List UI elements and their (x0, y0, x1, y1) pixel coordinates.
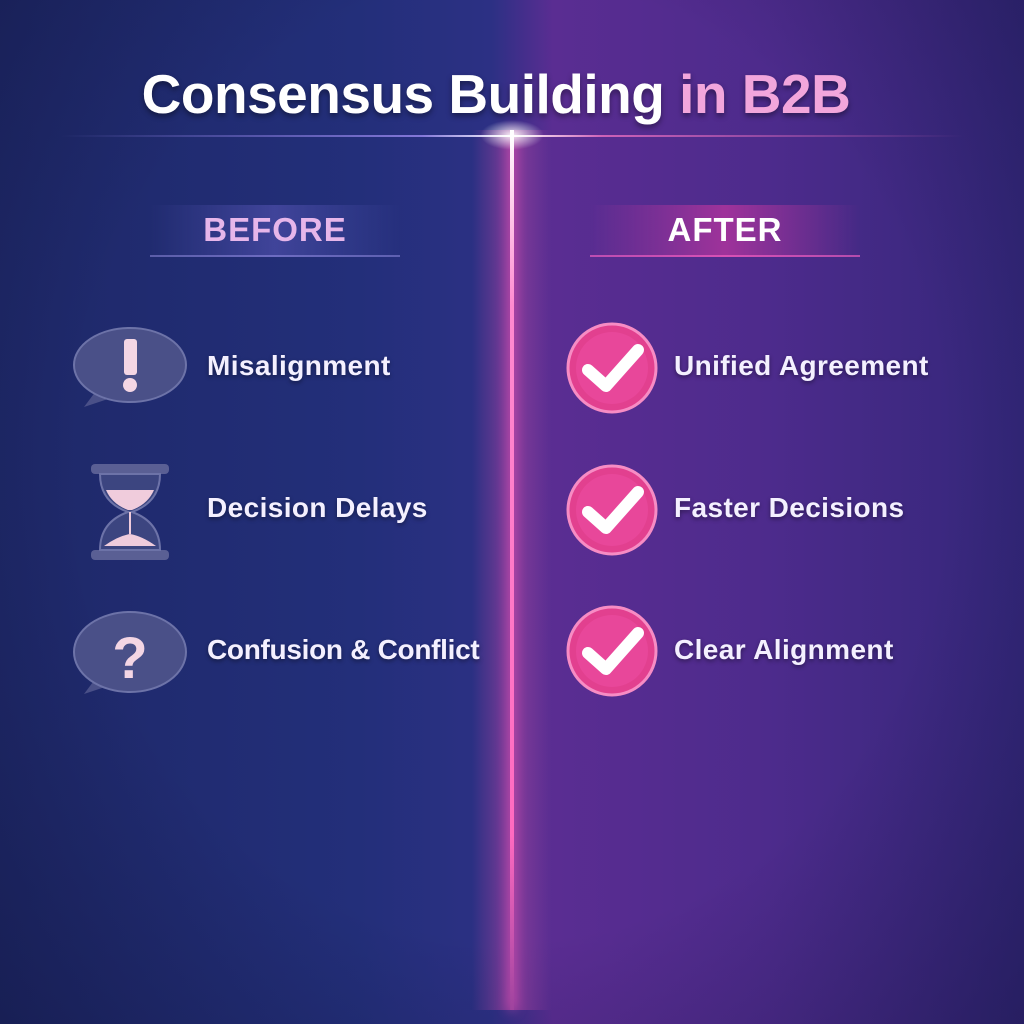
icon: hourglass (91, 464, 169, 560)
text: decision delays: Decision Delays (207, 492, 428, 523)
divider glow line (472, 130, 552, 1010)
text: unified agreement: Unified Agreement (674, 350, 929, 381)
icon: question bubble: ? (112, 626, 148, 691)
text: faster decisions: Faster Decisions (674, 492, 904, 523)
heading: after: AFTER (668, 211, 782, 248)
text: clear alignment: Clear Alignment (674, 634, 894, 665)
icon: check 2 (566, 464, 658, 556)
heading: before: BEFORE (203, 211, 347, 248)
title: Consensus Building in B2B (142, 63, 850, 125)
icon: check 1 (566, 322, 658, 414)
heading: before (150, 205, 400, 257)
icon: exclamation bubble (73, 327, 187, 407)
text: misalignment: Misalignment (207, 350, 391, 381)
text: confusion: Confusion & Conflict (207, 634, 479, 665)
icon: question bubble (73, 611, 187, 694)
heading: after (590, 205, 860, 257)
title underline (60, 135, 964, 137)
icon: check 3 (566, 606, 658, 696)
